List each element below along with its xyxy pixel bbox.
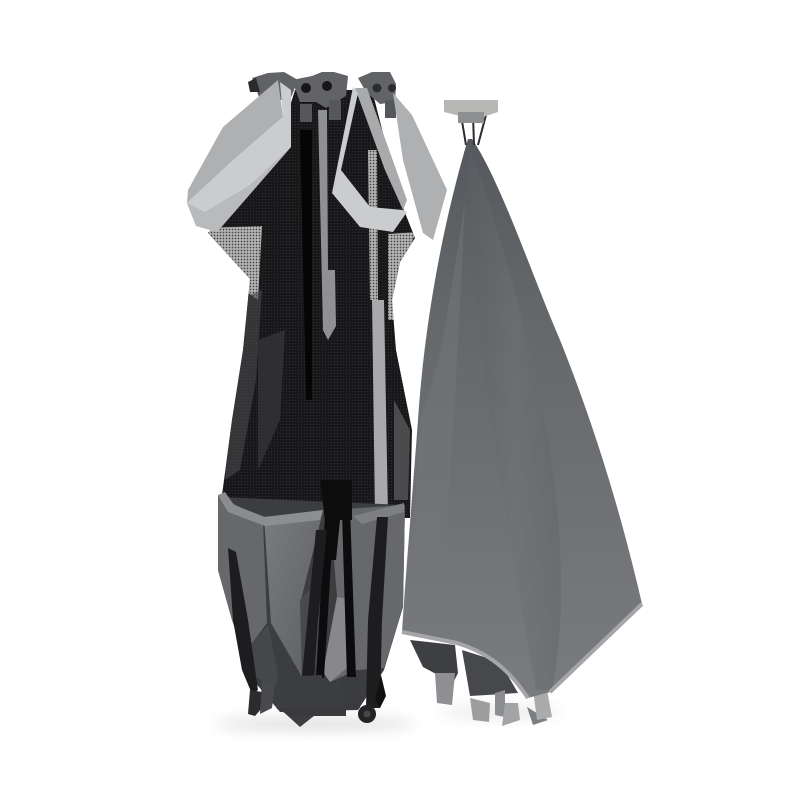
lower fabric backing [218, 497, 405, 712]
nylon straps [228, 517, 388, 708]
canopy support wires [461, 115, 486, 145]
floor shadow [215, 706, 560, 730]
top plate [444, 100, 498, 123]
canopy hem [402, 604, 642, 698]
feet and wheels [248, 675, 386, 727]
product photo: folded travel crib and canopy [187, 72, 644, 735]
canopy feet and clips [410, 640, 552, 726]
canopy unit [402, 100, 642, 726]
crib frame: folded mesh and fabric unit [187, 72, 447, 727]
grey strap loops [187, 80, 447, 240]
black frame tubes [316, 480, 356, 678]
top hinges [248, 72, 396, 122]
canopy folds [468, 150, 561, 690]
mesh body [200, 85, 420, 525]
canopy fabric [402, 139, 642, 698]
lower fabric pockets [218, 492, 405, 685]
